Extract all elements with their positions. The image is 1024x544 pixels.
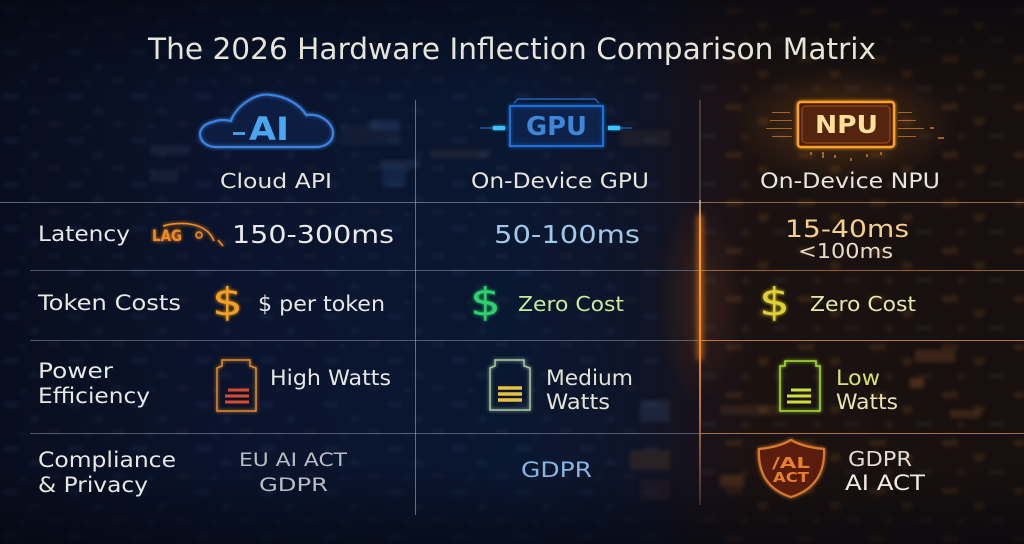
GPU power value bbox=[546, 366, 633, 414]
GPU latency value: 50-100ms bbox=[494, 220, 640, 249]
icon: AI Act shield: ACT bbox=[773, 471, 809, 486]
column heading: Cloud API bbox=[220, 169, 332, 193]
icon: high battery bbox=[217, 360, 256, 411]
icon: lag gauge bbox=[152, 223, 223, 246]
row label: Compliance bbox=[38, 448, 176, 473]
NPU compliance value: AI ACT bbox=[845, 471, 925, 495]
column: On-Device NPU bbox=[760, 102, 944, 193]
row label: Latency bbox=[38, 222, 130, 247]
GPU cost value: Zero Cost bbox=[518, 292, 624, 316]
cloud compliance value: EU AI ACT bbox=[239, 449, 347, 471]
NPU power value bbox=[836, 366, 898, 414]
row: Power Efficiency bbox=[38, 359, 898, 414]
icon: medium battery bbox=[490, 360, 530, 410]
GPU power value: Watts bbox=[546, 390, 610, 414]
NPU latency value: <100ms bbox=[798, 239, 893, 263]
row: Latency bbox=[38, 215, 909, 263]
icon: NPU chip bbox=[766, 102, 944, 161]
row label: & Privacy bbox=[38, 473, 148, 498]
row label: Efficiency bbox=[38, 384, 150, 409]
cloud cost value: $ per token bbox=[258, 292, 385, 316]
icon: orange dollar: $ bbox=[212, 280, 243, 324]
icon: AI Act shield bbox=[759, 440, 824, 497]
NPU cost value: Zero Cost bbox=[810, 292, 916, 316]
row: Compliance & Privacy bbox=[38, 440, 925, 498]
icon: low battery bbox=[780, 361, 820, 411]
row label: Token Costs bbox=[37, 291, 181, 316]
column heading: On-Device NPU bbox=[760, 169, 940, 193]
column heading: On-Device GPU bbox=[471, 169, 649, 193]
cloud compliance value: GDPR bbox=[259, 474, 328, 496]
NPU compliance value bbox=[845, 447, 925, 495]
icon: AI cloud: AI bbox=[249, 110, 289, 148]
cloud latency value: 150-300ms bbox=[232, 220, 394, 249]
NPU latency value bbox=[785, 215, 909, 263]
icon: NPU chip: NPU bbox=[815, 110, 878, 139]
icon: yellow dollar: $ bbox=[759, 280, 790, 324]
cloud compliance value bbox=[239, 449, 347, 496]
cloud power value: High Watts bbox=[270, 366, 391, 390]
NPU compliance value: GDPR bbox=[848, 447, 912, 471]
icon: green dollar: $ bbox=[470, 280, 501, 324]
icon: GPU chip: GPU bbox=[526, 112, 587, 142]
column: On-Device GPU bbox=[471, 99, 649, 193]
NPU power value: Watts bbox=[836, 390, 898, 414]
row label bbox=[38, 448, 176, 498]
row: Token Costs bbox=[37, 280, 916, 324]
NPU latency value: 15-40ms bbox=[785, 215, 909, 243]
title: The 2026 Hardware Inflection Comparison Matrix bbox=[147, 32, 876, 66]
column: Cloud API bbox=[200, 95, 333, 193]
icon: AI Act shield: /AL bbox=[772, 454, 811, 472]
table grid lines bbox=[0, 100, 1024, 515]
icon: GPU chip bbox=[480, 99, 632, 146]
NPU power value: Low bbox=[836, 366, 880, 390]
GPU compliance value: GDPR bbox=[521, 458, 592, 482]
icon: lag gauge: LAG bbox=[152, 226, 182, 245]
row label bbox=[38, 359, 150, 409]
row label: Power bbox=[38, 359, 113, 384]
GPU power value: Medium bbox=[546, 366, 633, 390]
